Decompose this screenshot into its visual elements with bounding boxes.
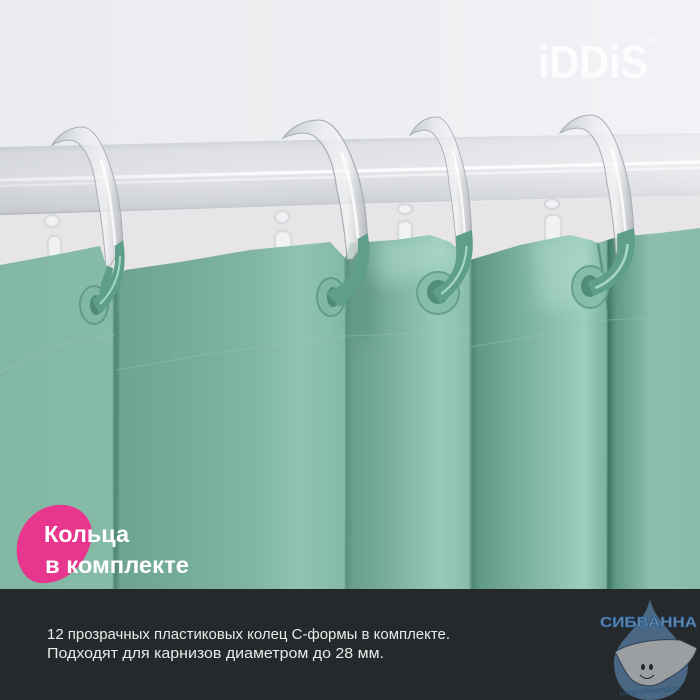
logo: IDDIS: ® — [649, 36, 655, 45]
description text — [47, 626, 450, 662]
bottom band — [0, 589, 700, 700]
callout heading — [44, 521, 189, 578]
url: www.sibvanna.ru — [619, 684, 681, 698]
wordmark: СИБВАННА — [600, 614, 697, 631]
logo: IDDIS: iDDiS — [538, 36, 648, 88]
curtain folds — [112, 236, 610, 590]
watermark logo: Сибванна — [600, 598, 697, 700]
ring 3 tail — [433, 230, 473, 304]
ring 1 — [52, 127, 125, 324]
ring 2 tail — [326, 233, 369, 307]
description text: 12 прозрачных пластиковых колец С-формы в комплекте. — [47, 626, 450, 643]
ring 1 body — [52, 127, 123, 266]
callout heading: в комплекте — [45, 552, 189, 578]
ring 4 tail — [587, 228, 635, 296]
pink blob — [17, 505, 92, 583]
callout heading: Кольца — [44, 521, 129, 547]
grommet 2 — [317, 278, 345, 316]
ring 2 body — [283, 120, 369, 307]
bathtub face — [640, 664, 654, 678]
curtain rod — [0, 133, 700, 215]
grommet 3 — [417, 272, 459, 314]
ring 2 — [283, 120, 369, 316]
water drop — [614, 598, 688, 700]
hem stitching — [0, 315, 700, 372]
bathtub — [615, 640, 697, 686]
shower curtain — [0, 228, 700, 590]
ring reflections below the rod — [45, 199, 561, 258]
ring 3 body — [410, 117, 473, 304]
grommet 1 — [80, 286, 108, 324]
ring 1 tail — [92, 240, 125, 314]
ring 4 body — [560, 115, 635, 296]
description text: Подходят для карнизов диаметром до 28 мм. — [47, 645, 384, 662]
ring 3 — [410, 117, 473, 314]
ring 4 — [560, 115, 635, 308]
grommet 4 — [572, 266, 608, 308]
